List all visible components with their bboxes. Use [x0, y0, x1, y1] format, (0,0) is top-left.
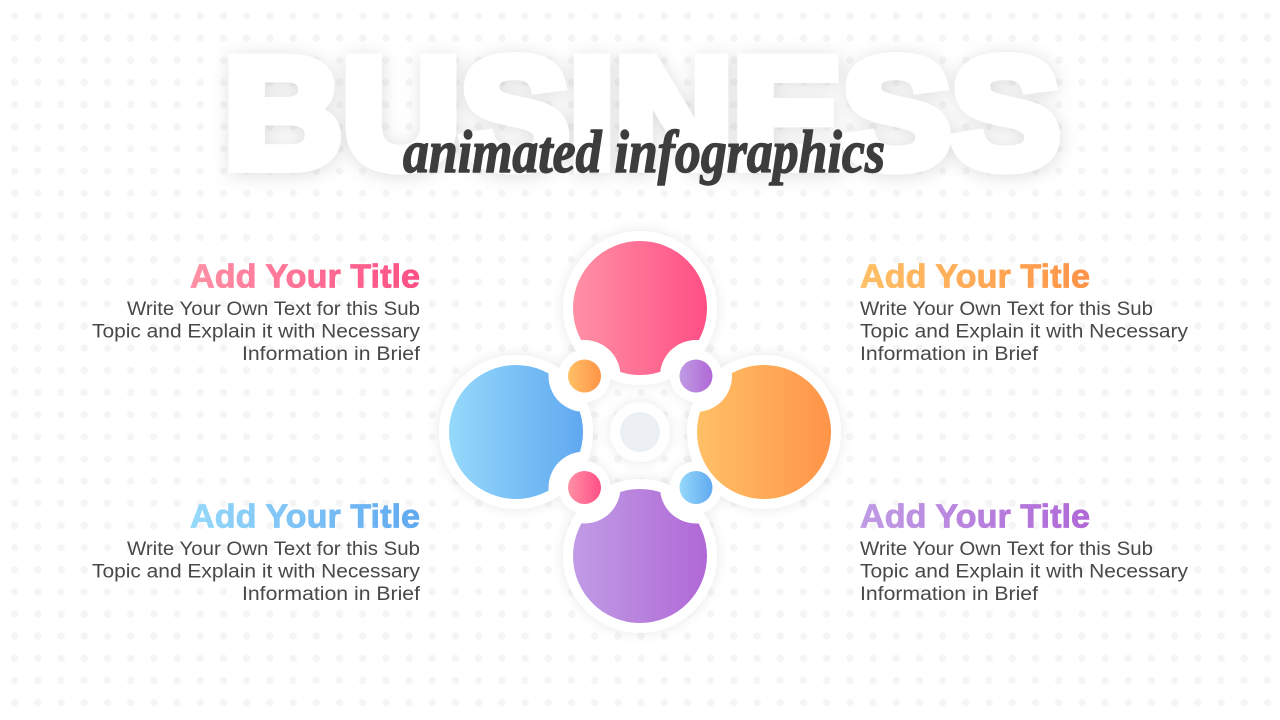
title: Add Your Title — [190, 498, 420, 534]
body text — [860, 539, 1189, 605]
text block: bottom right — [860, 498, 1189, 605]
title: Add Your Title — [860, 498, 1090, 534]
text block: top left — [92, 258, 421, 365]
circle: purple bottom — [573, 489, 707, 623]
title: Add Your Title — [860, 258, 1090, 294]
body text — [860, 299, 1189, 365]
body text: Information in Brief — [242, 344, 421, 365]
body text — [92, 539, 421, 605]
small dot: orange — [568, 360, 601, 392]
body text: Topic and Explain it with Necessary — [860, 562, 1189, 582]
small dot: blue — [680, 471, 712, 504]
body text: Information in Brief — [860, 344, 1039, 365]
body text: Write Your Own Text for this Sub — [127, 539, 420, 560]
circle: blue left — [449, 365, 583, 499]
body text: Information in Brief — [860, 584, 1039, 605]
small dot: pink — [568, 471, 601, 504]
diagram: four-circle cluster — [439, 231, 841, 633]
text block: top right — [860, 258, 1189, 365]
centre hub — [610, 402, 670, 462]
body text: Write Your Own Text for this Sub — [860, 539, 1153, 560]
white backing discs — [439, 231, 841, 633]
body text: Topic and Explain it with Necessary — [860, 322, 1189, 342]
body text — [92, 299, 421, 365]
body text: Topic and Explain it with Necessary — [92, 562, 421, 582]
title: Add Your Title — [190, 258, 420, 294]
heading: BUSINESS watermark: BUSINESS — [224, 27, 1060, 201]
subtitle: animated infographics: animated infographics — [403, 119, 885, 185]
body text: Write Your Own Text for this Sub — [127, 299, 420, 320]
circle: pink top — [573, 241, 707, 375]
body text: Information in Brief — [242, 584, 421, 605]
body text: Write Your Own Text for this Sub — [860, 299, 1153, 320]
body text: Topic and Explain it with Necessary — [92, 322, 421, 342]
circle: orange right — [697, 365, 831, 499]
small dot: purple — [680, 360, 712, 392]
text block: bottom left — [92, 498, 421, 605]
